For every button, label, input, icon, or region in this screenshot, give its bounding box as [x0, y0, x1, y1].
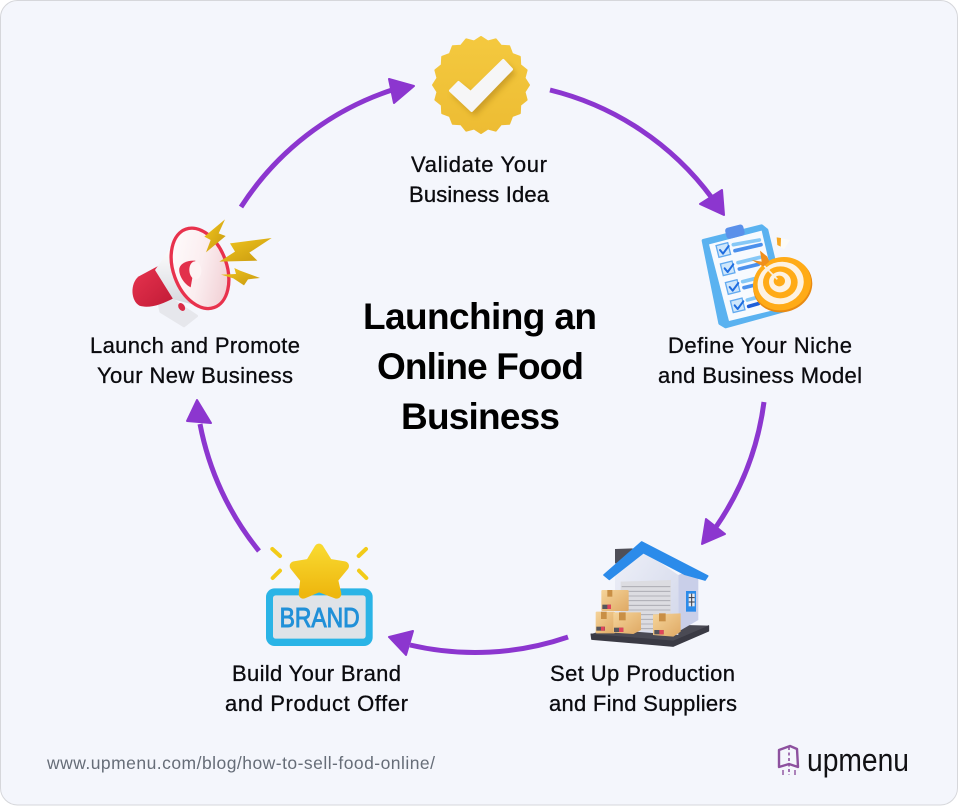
arrow: brand to launch	[187, 400, 259, 551]
arrow: define to production	[702, 402, 764, 544]
label: define your niche and business model: Define Your Niche	[668, 333, 852, 358]
arrow: launch to validate	[241, 79, 414, 207]
label: set up production and find suppliers: and Find Suppliers	[549, 691, 737, 716]
arrow: validate to define	[550, 90, 724, 215]
title: Online Food	[377, 346, 584, 387]
label: build your brand and product offer: Build Your Brand	[232, 661, 401, 686]
arrow: production to brand	[389, 631, 568, 655]
label: set up production and find suppliers	[549, 661, 737, 716]
title: Launching an	[363, 296, 597, 337]
title: Business	[401, 396, 560, 437]
label: validate your business idea: Validate Your	[411, 152, 547, 177]
logo: upmenu: upmenu	[807, 742, 909, 778]
label: launch and promote your new business	[90, 333, 300, 388]
icon: open book logo mark	[779, 746, 798, 775]
label: define your niche and business model: and Business Model	[658, 363, 862, 388]
icon: brand sign with star: BRAND	[280, 602, 360, 633]
label: build your brand and product offer	[225, 661, 408, 716]
icon: brand sign with star	[266, 548, 373, 646]
label: set up production and find suppliers: Set Up Production	[550, 661, 735, 686]
label: define your niche and business model	[658, 333, 862, 388]
source url: www.upmenu.com/blog/how-to-sell-food-online/	[46, 753, 435, 773]
icon: megaphone	[132, 219, 272, 326]
label: launch and promote your new business: Your New Business	[97, 363, 293, 388]
icon: clipboard and target	[703, 224, 820, 327]
icon: validation badge with check mark	[433, 37, 529, 133]
label: build your brand and product offer: and Product Offer	[225, 691, 408, 716]
icon: warehouse with boxes	[591, 542, 709, 646]
label: validate your business idea: Business Idea	[409, 182, 550, 207]
label: validate your business idea	[409, 152, 550, 207]
title	[363, 296, 597, 437]
label: launch and promote your new business: Launch and Promote	[90, 333, 300, 358]
